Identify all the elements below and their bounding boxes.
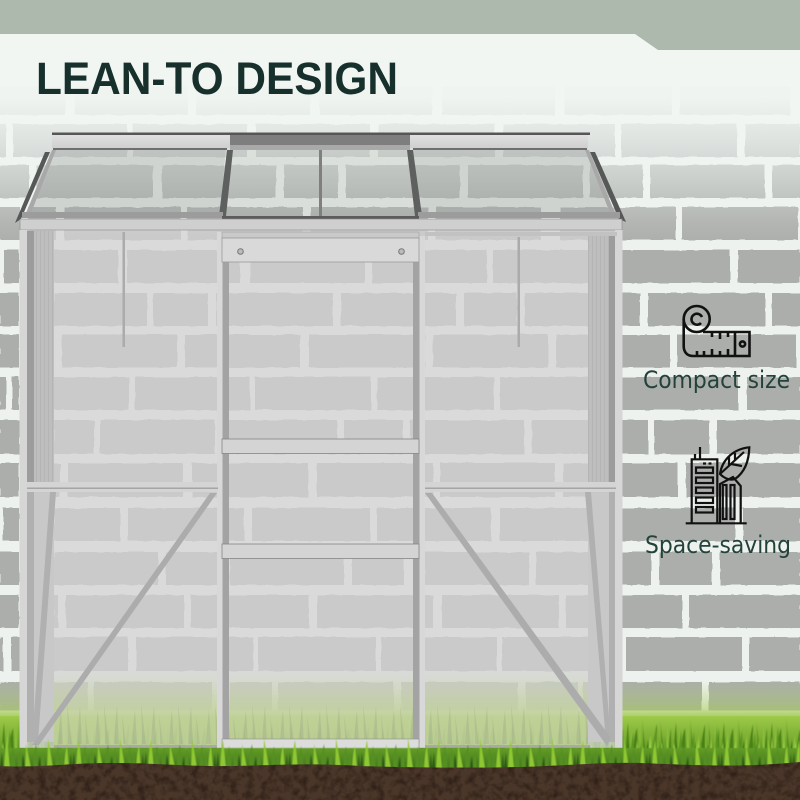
side shelf rails (27, 482, 616, 492)
faint grass seen through panels (54, 700, 588, 744)
window support rods (122, 232, 520, 347)
icon: tape measure (684, 306, 750, 356)
translucent wall panels (22, 230, 622, 748)
background grass (0, 680, 800, 770)
roof (15, 132, 626, 223)
icon: city building and leaf (686, 447, 749, 523)
left side panel (20, 230, 56, 748)
top beam (20, 219, 622, 230)
greenhouse (15, 132, 626, 750)
label: compact size: Compact size (643, 366, 790, 394)
title band (0, 0, 800, 50)
right side panel (585, 230, 622, 748)
soil (0, 762, 800, 800)
heading: LEAN-TO DESIGN (36, 53, 398, 104)
green haze seen through panels (54, 670, 588, 748)
door frame (54, 232, 617, 750)
diagonal braces (32, 493, 611, 746)
foreground grass (0, 736, 800, 770)
